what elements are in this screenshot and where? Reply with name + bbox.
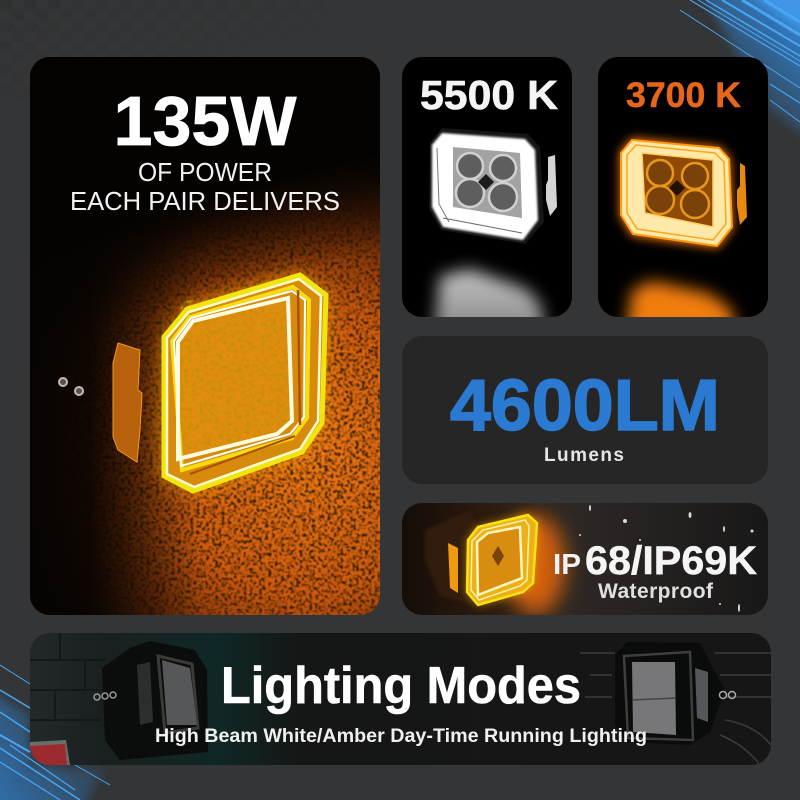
heading: 68/IP69K: 68/IP69K: [585, 539, 757, 583]
heading: 5500 K: 5500 K: [420, 72, 558, 118]
white light reflection: [434, 269, 546, 335]
icon: side reflector: [113, 343, 142, 462]
panel: 4600LM lumens: [402, 336, 768, 484]
icon: amber square light: [620, 138, 733, 248]
panel: waterproof rating: [402, 503, 768, 615]
icon: side reflector: [448, 543, 458, 593]
panel: 135W power: [30, 57, 380, 615]
text: IP prefix: IP: [553, 549, 581, 581]
blue light streaks: bottom left: [0, 665, 110, 800]
text: lighting modes description: High Beam White/Amber Day-Time Running Lighting: [155, 726, 647, 747]
orange wet grain texture: [30, 57, 380, 615]
panel: lighting modes: [30, 633, 771, 765]
text: lumens: Lumens: [544, 445, 624, 466]
water droplets: [579, 505, 768, 612]
icon: mounting bolts: [59, 378, 83, 395]
panel: 3700 K: [598, 57, 768, 335]
panel background: [402, 503, 768, 615]
heading: 4600LM: 4600LM: [450, 366, 720, 446]
right backdrop lines: [580, 653, 771, 765]
icon: white side reflector: [546, 155, 557, 216]
icon: light housing: [424, 512, 474, 603]
text: each pair delivers: EACH PAIR DELIVERS: [70, 186, 340, 216]
amber light reflection: [626, 281, 738, 335]
icon: amber square light, waterproof: [467, 515, 537, 605]
heading: 3700 K: 3700 K: [626, 76, 741, 115]
icon: amber side reflector: [737, 163, 747, 225]
panel background: [402, 57, 572, 317]
panel background: [598, 57, 768, 317]
background hex pattern: [0, 0, 330, 100]
icon: amber square light, large: [162, 273, 327, 493]
icon: white square light: [429, 128, 544, 244]
panel background: [30, 633, 771, 765]
icon: left dark light: [94, 641, 208, 760]
icon: right dark light: [615, 642, 736, 745]
heading: lighting modes: Lighting Modes: [221, 657, 581, 715]
panel background: [402, 336, 768, 484]
left backdrop bricks: [30, 633, 105, 720]
orange glow behind light: [505, 515, 565, 615]
heading: 135W: 135W: [114, 82, 296, 160]
panel background: [30, 57, 380, 615]
panel: 5500 K: [402, 57, 572, 335]
blue light streaks: top right: [680, 0, 800, 140]
left backdrop red sign: [30, 740, 70, 765]
text: waterproof: Waterproof: [598, 580, 714, 603]
text: of power: OF POWER: [138, 157, 272, 187]
